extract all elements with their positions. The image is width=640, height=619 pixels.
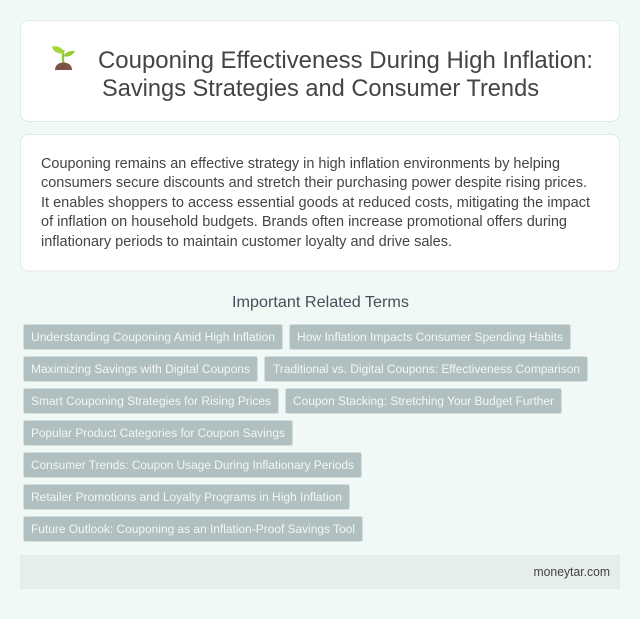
- tag: Retailer Promotions and Loyalty Programs in High Inflation: [31, 490, 342, 504]
- tag: [24, 420, 292, 446]
- tag: How Inflation Impacts Consumer Spending Habits: [297, 330, 563, 344]
- icon: seedling: [52, 46, 75, 70]
- tag: Understanding Couponing Amid High Inflation: [31, 330, 275, 344]
- tag: Smart Couponing Strategies for Rising Prices: [31, 394, 271, 408]
- tag: Popular Product Categories for Coupon Savings: [31, 426, 285, 440]
- tag: [264, 356, 588, 382]
- tag: [24, 388, 278, 414]
- description text: Couponing remains an effective strategy in high inflation environments by helping: [41, 156, 560, 172]
- tag: [24, 452, 362, 478]
- tag: [24, 324, 282, 350]
- tag: [24, 516, 362, 542]
- tag list: [24, 324, 588, 542]
- tag: [24, 356, 258, 382]
- footer: [20, 555, 620, 589]
- title: [98, 47, 593, 102]
- description text: inflationary periods to maintain customer loyalty and drive sales.: [41, 234, 452, 250]
- heading: important related terms: Important Related Terms: [232, 294, 409, 311]
- description text: It enables shoppers to access essential goods at reduced costs, mitigating the impact: [41, 195, 590, 211]
- title: Couponing Effectiveness During High Inflation:: [98, 47, 593, 74]
- description text: of inflation on household budgets. Brands often increase promotional offers during: [41, 214, 567, 230]
- tag: Future Outlook: Couponing as an Inflation-Proof Savings Tool: [31, 522, 355, 536]
- tag: Traditional vs. Digital Coupons: Effectiveness Comparison: [273, 362, 580, 376]
- tag: [24, 484, 350, 510]
- tag: [286, 388, 562, 414]
- tag: Maximizing Savings with Digital Coupons: [31, 362, 250, 376]
- footer: moneytar.com: [534, 565, 610, 579]
- header panel: [20, 20, 620, 122]
- description text: [41, 156, 590, 250]
- panel: description: [20, 134, 620, 271]
- description text: consumers secure discounts and stretch their purchasing power despite rising prices.: [41, 175, 587, 191]
- title: Savings Strategies and Consumer Trends: [102, 75, 539, 102]
- tag: Coupon Stacking: Stretching Your Budget Further: [293, 394, 554, 408]
- tag: [290, 324, 570, 350]
- tag: Consumer Trends: Coupon Usage During Inflationary Periods: [31, 458, 354, 472]
